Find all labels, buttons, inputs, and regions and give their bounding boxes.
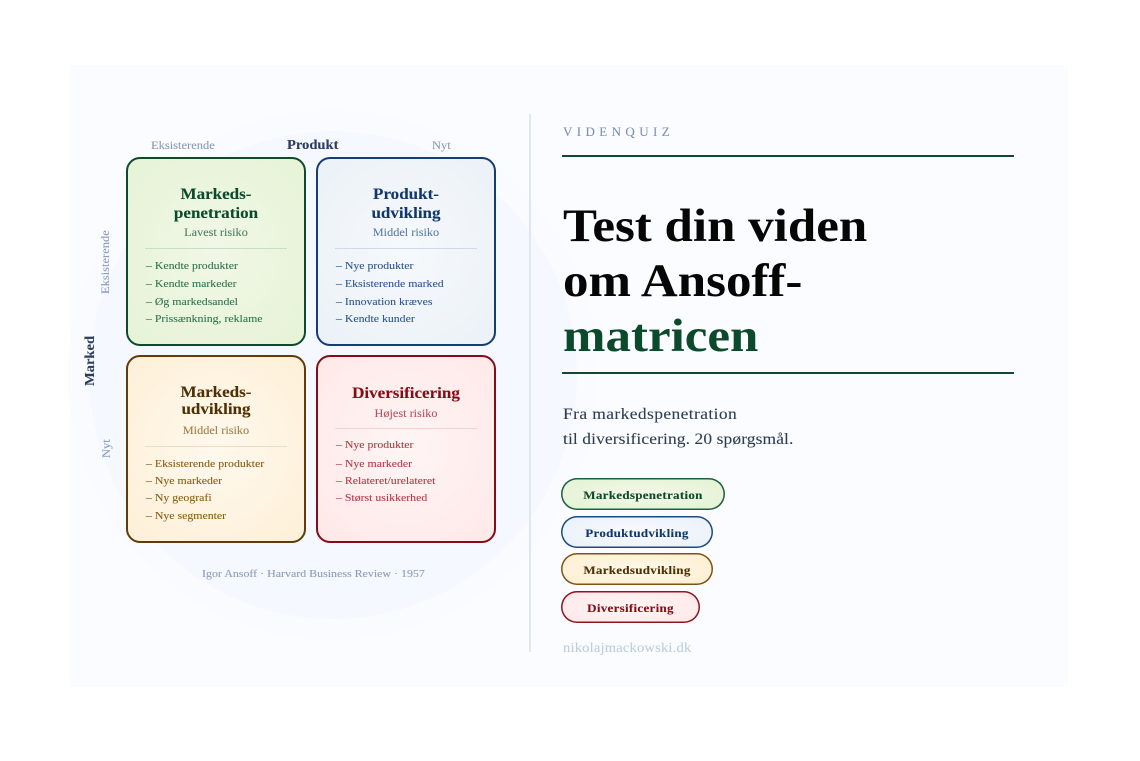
title bbox=[563, 200, 867, 362]
heading: udvikling bbox=[181, 401, 251, 418]
list item: – Nye produkter bbox=[336, 260, 413, 272]
risk label: Middel risiko bbox=[183, 424, 249, 436]
pill: Produktudvikling: Produktudvikling bbox=[585, 526, 689, 540]
title: matricen bbox=[563, 310, 758, 362]
axis label: Eksisterende marked: Eksisterende bbox=[100, 230, 112, 294]
panel: Markedsudvikling bbox=[126, 355, 306, 543]
risk label: Lavest risiko bbox=[184, 227, 248, 239]
panel: Markedspenetration bbox=[126, 157, 306, 346]
heading: Produkt- bbox=[373, 186, 439, 203]
vertical divider bbox=[529, 114, 530, 652]
axis label: Nyt marked: Nyt bbox=[101, 439, 113, 458]
background panel bbox=[70, 65, 1068, 687]
pill: Markedsudvikling bbox=[561, 553, 713, 585]
list item: – Kendte produkter bbox=[146, 260, 238, 272]
title: Test din viden bbox=[563, 200, 867, 252]
subtitle bbox=[563, 406, 793, 448]
list item: – Ny geografi bbox=[146, 492, 212, 504]
list item: – Eksisterende marked bbox=[336, 278, 444, 290]
subtitle: Fra markedspenetration bbox=[563, 406, 737, 423]
pill: Markedspenetration bbox=[561, 478, 725, 510]
list item: – Nye markeder bbox=[146, 475, 222, 487]
list item: – Prissænkning, reklame bbox=[146, 313, 263, 325]
heading: Markeds- bbox=[181, 186, 251, 203]
risk label: Højest risiko bbox=[375, 408, 437, 420]
pill: Diversificering: Diversificering bbox=[587, 600, 674, 614]
list item: – Øg markedsandel bbox=[146, 296, 238, 308]
list item: – Kendte kunder bbox=[336, 313, 415, 325]
website: nikolajmackowski.dk bbox=[563, 640, 691, 654]
list item: – Relateret/urelateret bbox=[336, 475, 435, 487]
panel: Produktudvikling bbox=[316, 157, 496, 346]
axis label: Eksisterende produkt: Eksisterende bbox=[151, 140, 215, 152]
axis label: Nyt produkt: Nyt bbox=[432, 140, 451, 152]
subtitle: til diversificering. 20 spørgsmål. bbox=[563, 431, 793, 448]
axis label: Produkt: Produkt bbox=[287, 137, 338, 152]
pill: Produktudvikling bbox=[561, 516, 713, 548]
panel: Diversificering bbox=[316, 355, 496, 543]
background glow circle bbox=[68, 110, 598, 640]
risk label: Middel risiko bbox=[373, 227, 439, 239]
heading: Markeds- bbox=[181, 384, 251, 401]
axis label: Marked: Marked bbox=[82, 335, 97, 386]
heading: penetration bbox=[174, 205, 258, 222]
title: om Ansoff- bbox=[563, 255, 802, 307]
heading: Diversificering bbox=[352, 384, 460, 402]
eyebrow: VIDENQUIZ: VIDENQUIZ bbox=[563, 124, 674, 139]
background circle bbox=[89, 131, 577, 619]
heading: udvikling bbox=[371, 205, 441, 222]
list item: – Eksisterende produkter bbox=[146, 458, 264, 470]
list item: – Nye markeder bbox=[336, 458, 412, 470]
list item: – Nye produkter bbox=[336, 439, 413, 451]
pill: Diversificering bbox=[561, 590, 700, 622]
pill: Markedsudvikling: Markedsudvikling bbox=[583, 563, 691, 577]
list item: – Nye segmenter bbox=[146, 510, 226, 522]
source caption: Igor Ansoff · Harvard Business Review · 1957 bbox=[202, 568, 425, 580]
list item: – Innovation kræves bbox=[336, 296, 432, 308]
pill: Markedspenetration: Markedspenetration bbox=[583, 488, 703, 502]
list item: – Kendte markeder bbox=[146, 278, 237, 290]
list item: – Størst usikkerhed bbox=[336, 492, 427, 504]
